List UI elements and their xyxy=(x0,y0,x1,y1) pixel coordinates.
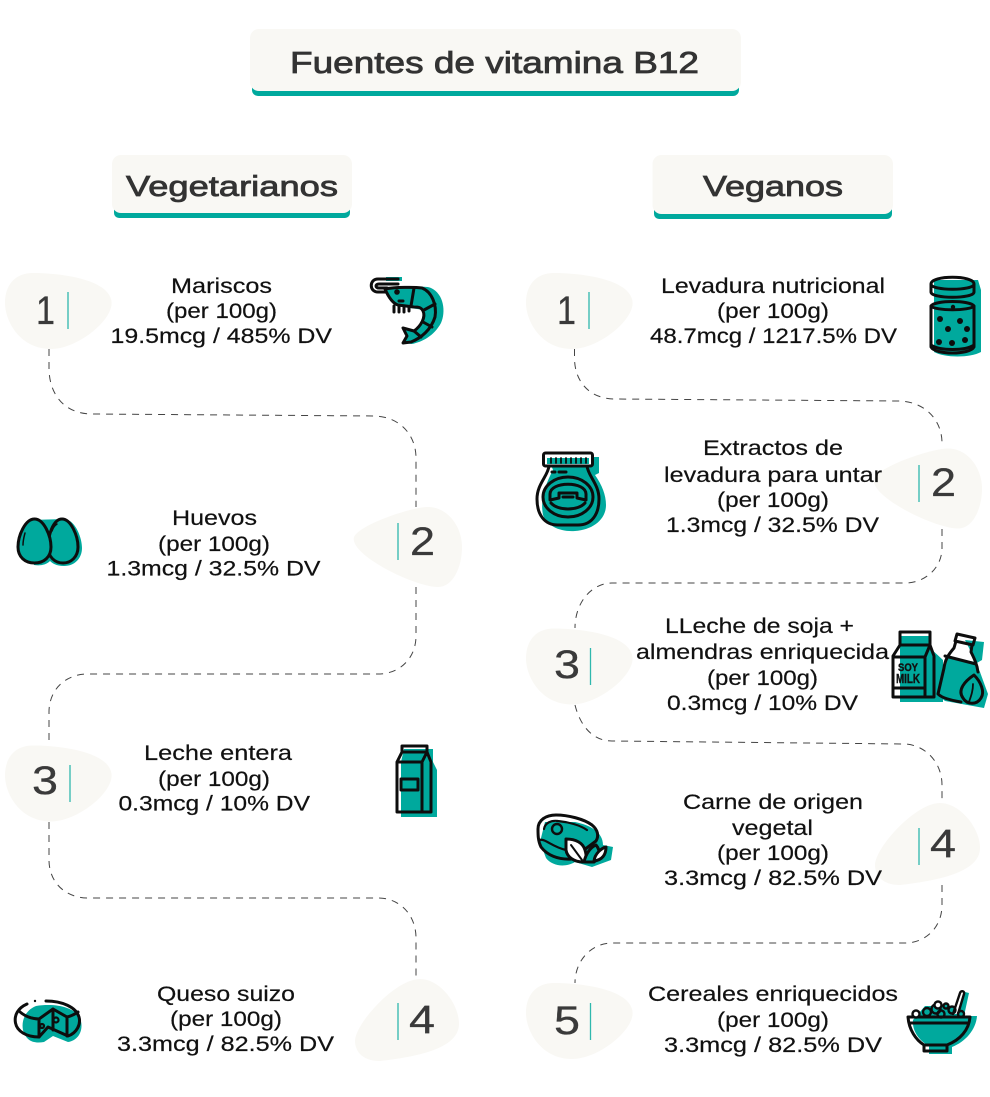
icon: eggs xyxy=(18,519,82,566)
item: Carne de origen vegetal xyxy=(664,790,980,890)
item: Huevos: 1.3mcg / 32.5% DV xyxy=(106,556,321,580)
item: Leche entera: (per 100g) xyxy=(158,767,270,791)
item: Leche entera: 0.3mcg / 10% DV xyxy=(118,792,311,816)
dashed path: vegetarianos xyxy=(49,349,416,979)
item: Extractos de levadura para untar: Extractos de xyxy=(703,436,843,460)
item: Queso suizo xyxy=(117,979,459,1061)
item: Mariscos: Mariscos xyxy=(171,274,272,298)
item: Queso suizo: 3.3mcg / 82.5% DV xyxy=(117,1032,335,1056)
item: Mariscos xyxy=(5,273,333,349)
item: Huevos: Huevos xyxy=(172,506,257,530)
item: Cereales enriquecidos: 3.3mcg / 82.5% DV xyxy=(664,1033,883,1057)
item: Carne de origen vegetal: 4 xyxy=(930,822,956,866)
item: Carne de origen vegetal: (per 100g) xyxy=(717,841,829,865)
icon: milk carton xyxy=(397,746,437,817)
heading: Vegetarianos: Vegetarianos xyxy=(126,171,338,203)
item: Carne de origen vegetal: 3.3mcg / 82.5% DV xyxy=(664,866,883,890)
item: Mariscos: (per 100g) xyxy=(166,299,277,323)
icon: shrimp xyxy=(371,277,444,344)
item: Cereales enriquecidos: 5 xyxy=(554,999,580,1043)
icon: soy milk carton and almond bottle: SOY xyxy=(898,662,919,674)
item: Carne de origen vegetal: Carne de origen xyxy=(683,790,863,814)
item: Leche entera: 3 xyxy=(32,759,58,803)
item: Levadura nutricional: Levadura nutricional xyxy=(661,274,885,298)
item: Leche de soja y almendras: LLeche de soja + xyxy=(665,614,854,638)
item: Leche de soja y almendras: 0.3mcg / 10% DV xyxy=(667,691,859,715)
item: Cereales enriquecidos: (per 100g) xyxy=(717,1008,829,1032)
icon: plant-based steak xyxy=(538,815,613,867)
item: Cereales enriquecidos xyxy=(526,982,898,1059)
item: Extractos de levadura para untar: levadura para untar xyxy=(664,463,882,487)
item: Queso suizo: (per 100g) xyxy=(170,1007,282,1031)
item: Leche entera xyxy=(5,741,311,822)
icon: yeast extract spread jar xyxy=(537,453,606,531)
heading: Veganos: Veganos xyxy=(703,171,843,203)
item: Carne de origen vegetal: vegetal xyxy=(732,816,813,840)
icon: soy milk carton and almond bottle: MILK xyxy=(896,671,920,686)
item: Queso suizo: Queso suizo xyxy=(157,982,295,1006)
item: Extractos de levadura para untar xyxy=(664,436,982,537)
icon: soy milk carton and almond bottle xyxy=(893,632,988,708)
item: Huevos xyxy=(106,506,462,587)
item: Extractos de levadura para untar: (per 100g) xyxy=(717,488,829,512)
item: Leche de soja y almendras: (per 100g) xyxy=(707,666,818,690)
icon: cheese xyxy=(15,1000,82,1042)
item: Leche de soja y almendras: almendras enriquecida xyxy=(636,640,889,664)
item: Levadura nutricional xyxy=(526,273,898,349)
icon: cereal bowl xyxy=(908,991,977,1054)
item: Leche entera: Leche entera xyxy=(144,741,292,765)
item: Levadura nutricional: (per 100g) xyxy=(717,299,829,323)
item: Extractos de levadura para untar: 2 xyxy=(931,461,956,505)
item: Leche de soja y almendras: 3 xyxy=(554,643,580,687)
title xyxy=(250,29,741,96)
dashed path: veganos xyxy=(574,349,942,983)
item: Huevos: 2 xyxy=(410,520,435,564)
item: Huevos: (per 100g) xyxy=(158,532,270,556)
item: Leche de soja y almendras xyxy=(526,614,889,715)
item: Levadura nutricional: 1 xyxy=(557,289,576,333)
item: Mariscos: 19.5mcg / 485% DV xyxy=(110,324,333,348)
item: Extractos de levadura para untar: 1.3mcg / 32.5% DV xyxy=(666,513,880,537)
heading: Veganos xyxy=(652,155,893,219)
heading: Vegetarianos xyxy=(112,155,352,218)
icon: yeast jar xyxy=(931,277,981,356)
title: Fuentes de vitamina B12 xyxy=(290,45,699,80)
item: Cereales enriquecidos: Cereales enriquecidos xyxy=(648,982,898,1006)
item: Mariscos: 1 xyxy=(36,289,55,333)
item: Queso suizo: 4 xyxy=(409,998,435,1042)
item: Levadura nutricional: 48.7mcg / 1217.5% DV xyxy=(650,324,898,348)
